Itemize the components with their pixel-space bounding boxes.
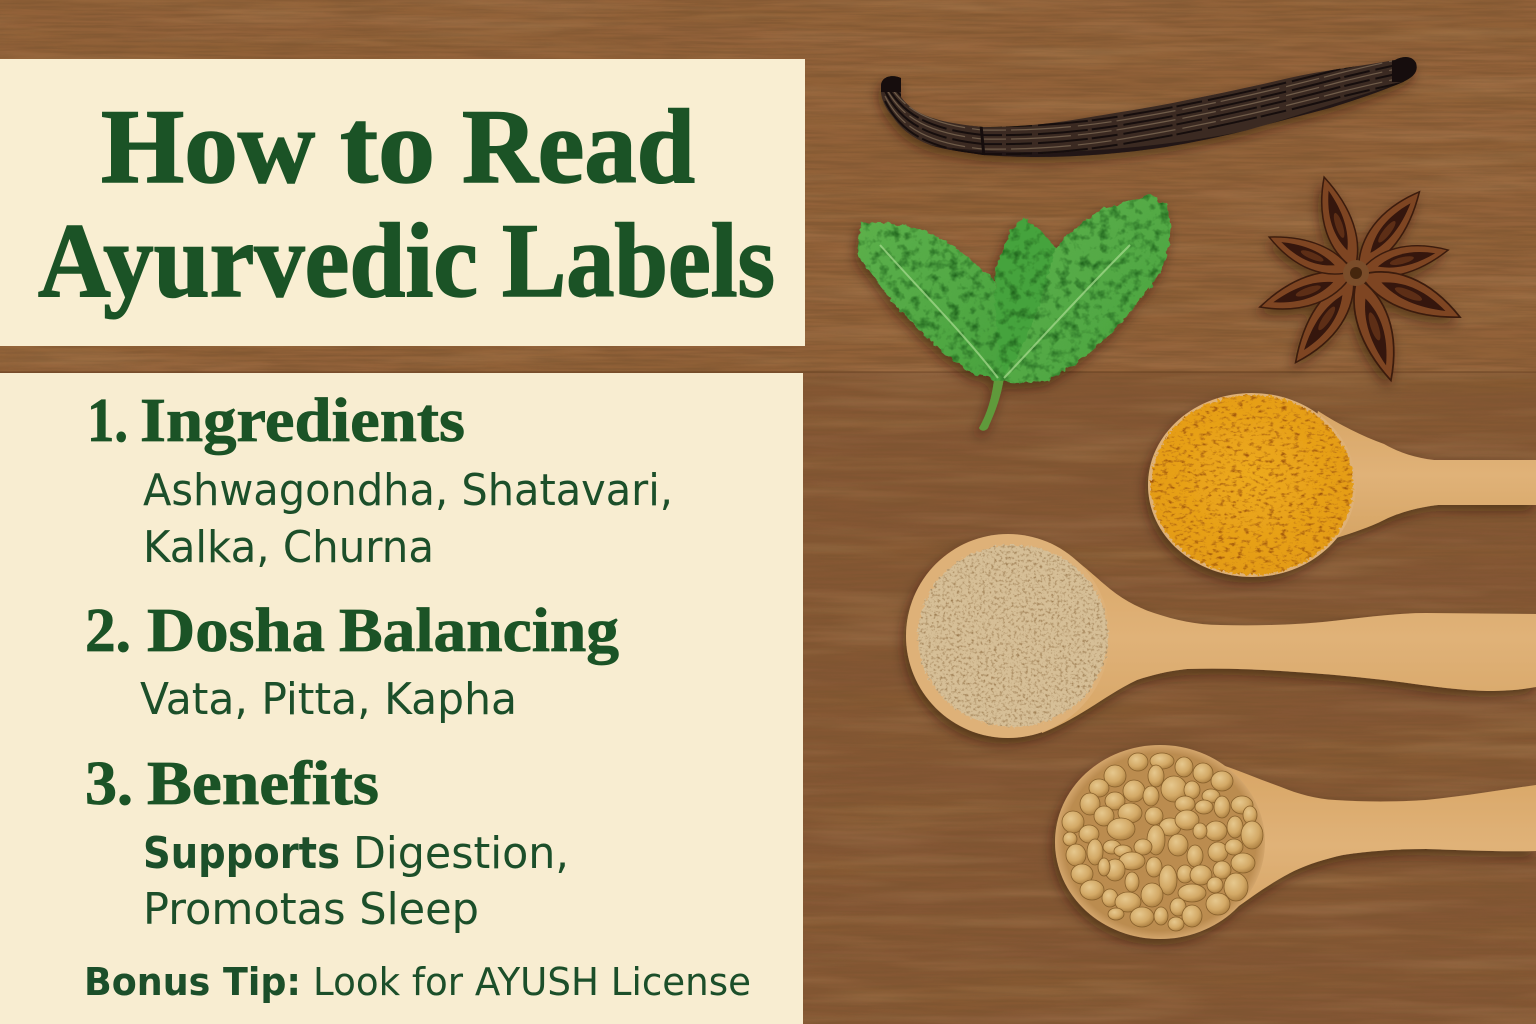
title heading [38, 88, 775, 319]
icon: star anise [1256, 173, 1467, 385]
section 2: dosha balancing: Dosha [147, 597, 325, 665]
bonus tip [84, 960, 751, 1004]
section 1: ingredients [87, 387, 673, 573]
panel: label guide [0, 373, 803, 1024]
icon: mint leaf [858, 195, 1171, 431]
leaf stem [979, 370, 1005, 431]
section 1: ingredients: 1. [87, 387, 128, 455]
bonus tip: Bonus Tip: [84, 960, 301, 1004]
icon: vanilla bean [870, 48, 1430, 165]
seeds [1062, 753, 1263, 931]
leaf blades [858, 195, 1171, 383]
section 3: benefits: Promotas Sleep [143, 884, 479, 935]
title heading: Labels [502, 202, 775, 319]
leaf veins [880, 245, 1130, 378]
section 3: benefits: Supports [143, 828, 340, 879]
title heading: Ayurvedic [38, 202, 478, 319]
section 2: dosha balancing [85, 597, 619, 725]
section 1: ingredients: Kalka, Churna [143, 522, 434, 573]
section 1: ingredients: Ingredients [140, 387, 465, 455]
icon: spoon with pale powder [906, 534, 1536, 738]
section 3: benefits: Digestion, [353, 828, 569, 879]
title heading: How [101, 88, 315, 205]
section 3: benefits: Benefits [147, 750, 379, 818]
icon: spoon with seeds [1055, 745, 1536, 939]
section 2: dosha balancing: Balancing [339, 597, 619, 665]
section 2: dosha balancing: 2. [85, 597, 131, 665]
section 1: ingredients: Ashwagondha, Shatavari, [143, 465, 673, 516]
bonus tip: Look for AYUSH License [313, 960, 751, 1004]
section 3: benefits: 3. [85, 750, 133, 818]
title heading: Read [462, 88, 695, 205]
title heading: to [340, 88, 435, 205]
section 3: benefits [85, 750, 569, 935]
panel: title [0, 59, 805, 346]
icon: spoon with turmeric [1148, 393, 1536, 577]
section 2: dosha balancing: Vata, Pitta, Kapha [140, 674, 517, 725]
